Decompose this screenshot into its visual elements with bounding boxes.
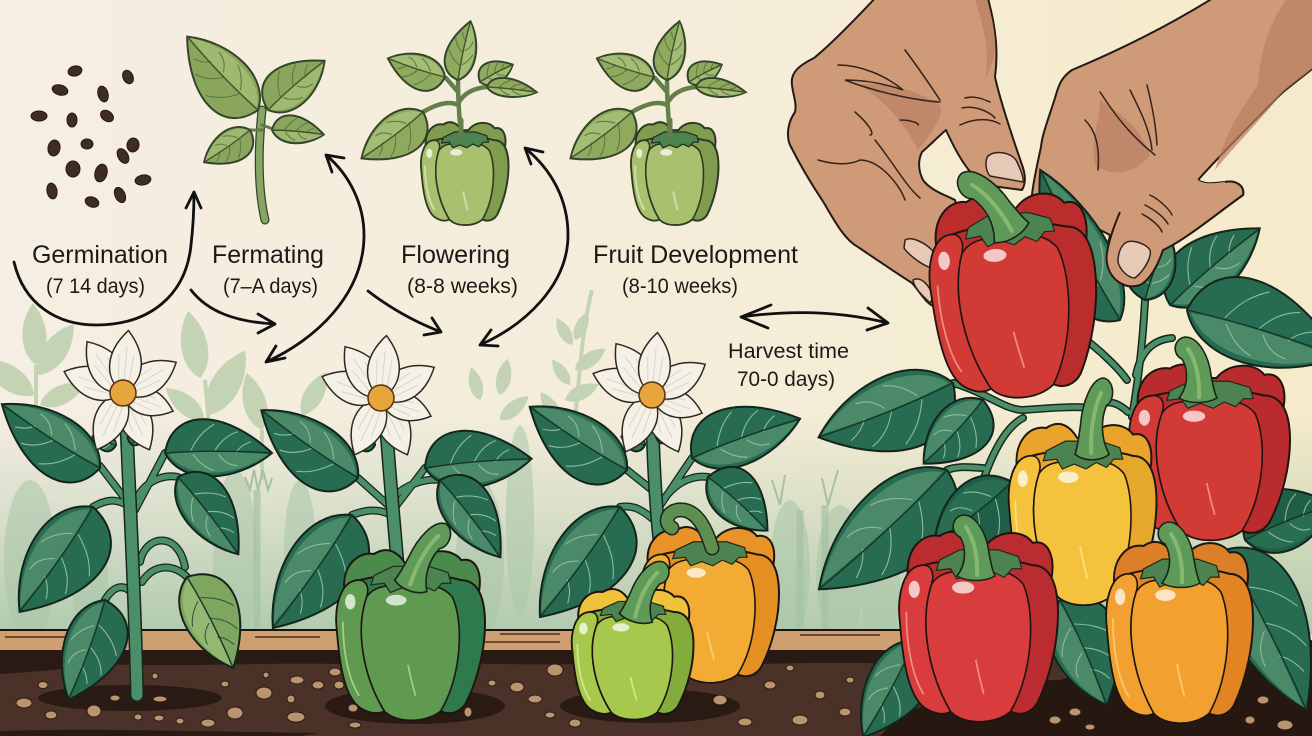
label: germination: (7 14 days) (46, 275, 145, 298)
harvest pepper: yellow (1009, 378, 1156, 605)
arrow: germination loop (14, 192, 201, 325)
background foliage (0, 290, 1312, 650)
stage 1: seeds (31, 64, 152, 209)
label: harvest time: 70-0 days) (737, 368, 835, 391)
nail: right thumb (1118, 241, 1150, 278)
label: flowering (401, 241, 518, 298)
harvest pepper: orange (1106, 522, 1253, 723)
harvest pepper: lower red (899, 515, 1058, 722)
label: fruit development (593, 241, 798, 298)
label: fruit development: Fruit Development (593, 241, 798, 269)
label: flowering: (8-8 weeks) (407, 275, 518, 298)
arrow: germination to fermating (191, 290, 275, 333)
held red pepper (924, 157, 1104, 403)
left hand (788, 0, 1025, 306)
arrow: fermating double curve (266, 155, 364, 362)
plant 3: ripening peppers (511, 331, 808, 719)
label: fermating: (7–A days) (223, 275, 318, 298)
nail: thumb (904, 239, 934, 268)
harvest plant: leaf behind the thumb (1008, 158, 1187, 337)
arrow: harvest double (741, 305, 888, 330)
label: fermating (212, 241, 324, 298)
harvest pepper: right red (1129, 337, 1290, 540)
thumb of the right hand (1107, 165, 1243, 286)
label: germination (32, 241, 168, 298)
arrow: flowering double curve (480, 148, 568, 346)
nail: index finger (986, 153, 1023, 182)
label: germination: Germination (32, 241, 168, 269)
stage 4: seedling with developing fruit (560, 18, 747, 225)
label: harvest time (728, 340, 849, 391)
wooden plank (0, 629, 905, 653)
stage 3: seedling with young pepper (351, 18, 538, 225)
soil (0, 640, 1312, 736)
arrow: fermating to flowering (368, 291, 441, 335)
stage 2: seedling (164, 21, 336, 220)
label: fermating: Fermating (212, 241, 324, 269)
plant 2: green pepper (241, 334, 534, 720)
label: flowering: Flowering (401, 241, 510, 269)
plant 1: flowering plant (0, 329, 272, 712)
label: harvest time: Harvest time (728, 340, 849, 363)
right hand (1032, 0, 1312, 286)
harvest plant: stems and background leaves (795, 202, 1312, 736)
label: fruit development: (8-10 weeks) (622, 275, 738, 298)
